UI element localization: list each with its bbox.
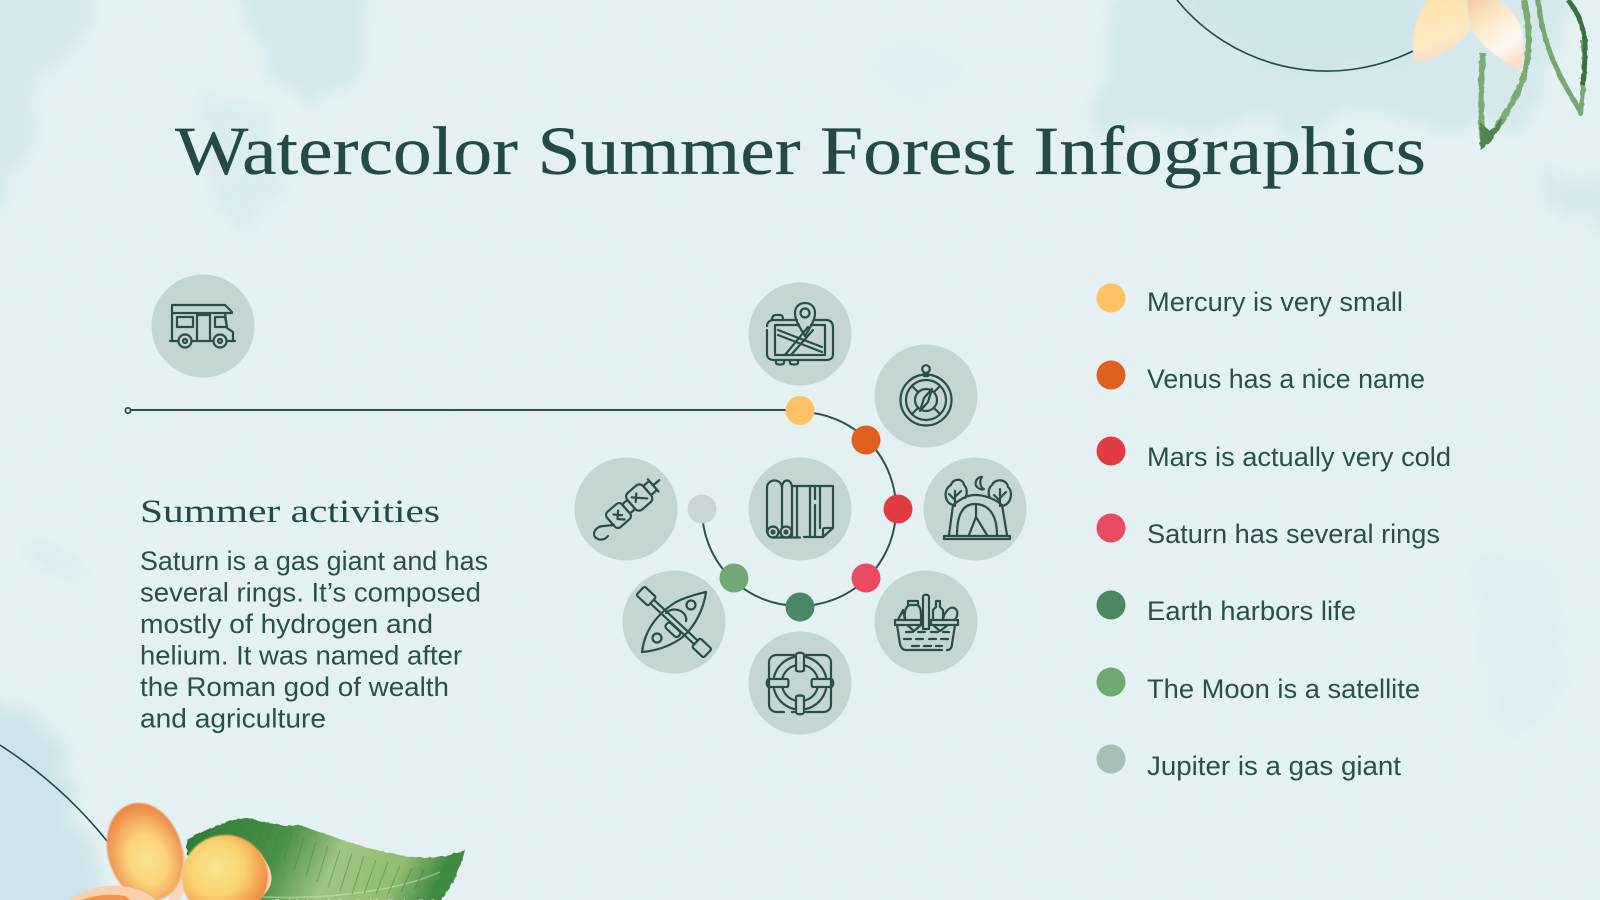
scroll maps icon badge — [748, 458, 852, 560]
legend item: Earth: Earth harbors life — [1147, 596, 1356, 626]
decorative arc: top right — [1177, 0, 1413, 71]
body text block: mostly of hydrogen and — [140, 609, 433, 639]
map pin icon badge — [748, 282, 852, 386]
life ring icon badge — [748, 632, 852, 734]
legend item: Venus: Venus has a nice name — [1147, 364, 1425, 394]
body text block: Saturn is a gas giant and has — [140, 546, 488, 576]
legend item: Jupiter — [1096, 744, 1402, 781]
tent icon badge — [924, 458, 1026, 560]
compass icon badge — [874, 344, 978, 448]
body text block — [140, 546, 488, 734]
legend item: Moon — [1096, 668, 1420, 704]
camper icon badge — [152, 274, 254, 378]
kayak icon badge — [622, 570, 726, 674]
legend item: Earth — [1096, 590, 1356, 626]
leaf veins — [249, 825, 440, 898]
circular diagram — [574, 282, 1026, 734]
legend item: Mercury: Mercury is very small — [1147, 287, 1403, 317]
legend item: Saturn: Saturn has several rings — [1147, 519, 1440, 549]
legend — [1096, 284, 1451, 781]
watercolor flower and leaf: bottom left — [70, 793, 465, 900]
heading: summer activities: Summer activities — [140, 494, 440, 530]
body text block: the Roman god of wealth — [140, 672, 449, 702]
body text block: helium. It was named after — [140, 640, 462, 670]
legend item: Moon: The Moon is a satellite — [1147, 674, 1420, 704]
body text block: several rings. It’s composed — [140, 578, 481, 608]
legend item: Jupiter: Jupiter is a gas giant — [1147, 751, 1402, 781]
title: Watercolor Summer Forest Infographics — [175, 113, 1426, 189]
ring markers — [688, 396, 912, 622]
ring arc — [702, 412, 896, 606]
timeline connector — [125, 408, 800, 413]
decorative arc: bottom left — [0, 745, 107, 841]
skewer icon badge — [574, 458, 678, 560]
legend item: Mars: Mars is actually very cold — [1147, 442, 1451, 472]
body text block: and agriculture — [140, 704, 326, 734]
picnic basket icon badge — [874, 570, 978, 674]
watercolor flower and leaves: top right — [1413, 0, 1585, 149]
